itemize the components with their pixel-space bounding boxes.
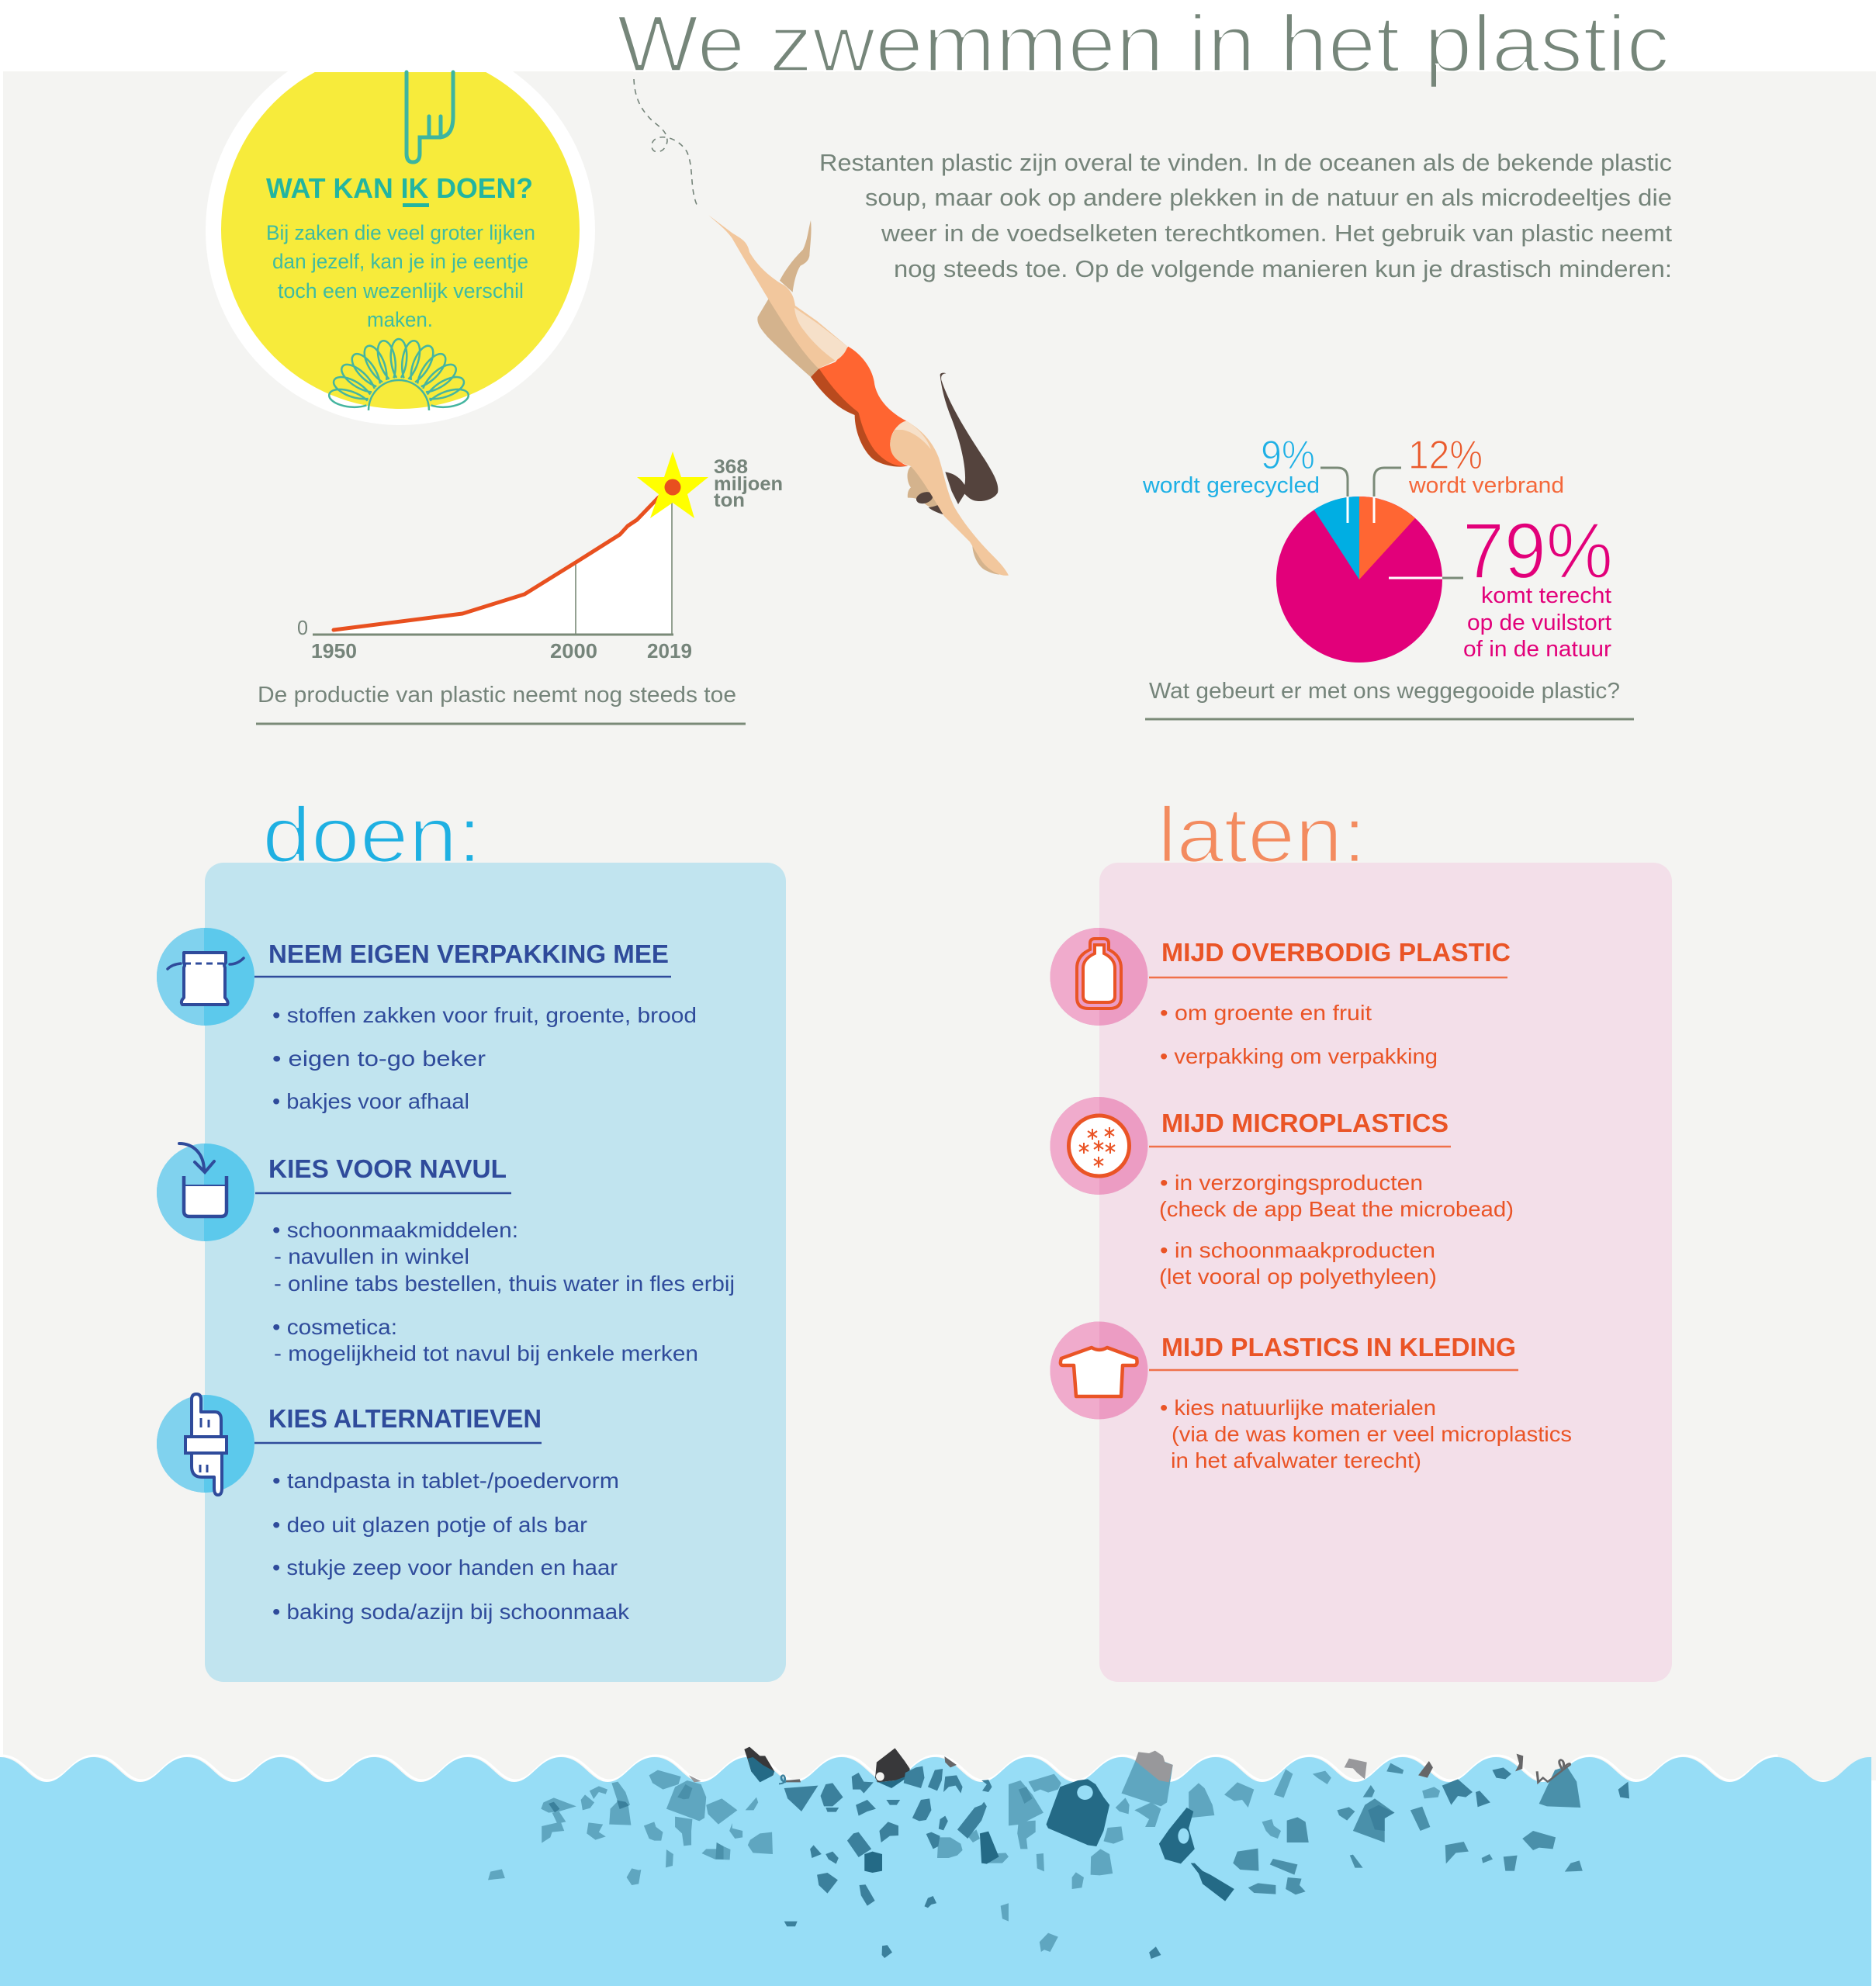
icon: microplastic particles <box>1050 1097 1148 1195</box>
label: 79%: op de vuilstort <box>1467 611 1611 635</box>
list: (check de app Beat the microbead) <box>1159 1197 1514 1221</box>
callout: wat kan ik doen circle <box>206 36 595 425</box>
list: • kies natuurlijke materialen <box>1160 1396 1436 1420</box>
icon: half flower <box>327 339 470 411</box>
list: • bakjes voor afhaal <box>272 1089 469 1113</box>
label: 9% <box>1142 433 1320 498</box>
list: • eigen to-go beker <box>272 1047 486 1071</box>
item: neem eigen verpakking mee <box>157 928 697 1113</box>
axis labels <box>297 616 692 663</box>
item: kies voor navul: KIES VOOR NAVUL <box>268 1154 507 1183</box>
chart area <box>334 487 672 635</box>
icon: cloth bag <box>157 928 254 1026</box>
label: 9%: 9% <box>1261 433 1315 478</box>
list <box>1160 1396 1572 1472</box>
label: 12% <box>1408 433 1564 498</box>
list <box>272 1218 735 1365</box>
list: • tandpasta in tablet-/poedervorm <box>272 1469 619 1493</box>
list: - online tabs bestellen, thuis water in fles erbij <box>274 1272 735 1296</box>
item: mijd plastics in kleding: MIJD PLASTICS IN KLEDING <box>1161 1333 1516 1361</box>
list <box>1159 1171 1514 1289</box>
item: mijd microplastics <box>1050 1097 1514 1289</box>
pie slices <box>1276 496 1442 663</box>
pie chart: plastic waste <box>1142 433 1634 719</box>
axis labels: 0 <box>297 616 308 639</box>
list: (via de was komen er veel microplastics <box>1172 1422 1572 1446</box>
item: kies alternatieven: KIES ALTERNATIEVEN <box>268 1404 542 1433</box>
list: • cosmetica: <box>272 1315 397 1339</box>
intro text: weer in de voedselketen terechtkomen. Het gebruik van plastic neemt <box>881 220 1673 247</box>
label: 79%: 79% <box>1462 507 1613 595</box>
list: • stukje zeep voor handen en haar <box>272 1555 618 1579</box>
item: mijd overbodig plastic: MIJD OVERBODIG PLASTIC <box>1161 938 1511 967</box>
label: 9%: wordt gerecycled <box>1142 473 1320 498</box>
list <box>272 1003 697 1113</box>
intro text: nog steeds toe. Op de volgende manieren kun je drastisch minderen: <box>894 256 1672 282</box>
intro text <box>819 150 1673 282</box>
list: • deo uit glazen potje of als bar <box>272 1513 587 1537</box>
value label <box>714 456 783 511</box>
item: neem eigen verpakking mee: NEEM EIGEN VERPAKKING MEE <box>268 939 669 968</box>
value label: ton <box>714 490 745 511</box>
axis labels: 2019 <box>647 639 692 663</box>
value label: 368 <box>714 456 748 478</box>
icon: hands with cuff <box>157 1394 254 1495</box>
item: kies voor navul <box>157 1144 735 1365</box>
item: mijd microplastics: MIJD MICROPLASTICS <box>1161 1109 1449 1137</box>
list: • schoonmaakmiddelen: <box>272 1218 518 1242</box>
list <box>272 1469 630 1624</box>
list: (let vooral op polyethyleen) <box>1159 1265 1437 1289</box>
list: • stoffen zakken voor fruit, groente, brood <box>272 1003 697 1027</box>
heading: laten: laten: <box>1158 792 1366 879</box>
label: 12%: 12% <box>1408 433 1483 478</box>
title: We zwemmen in het plastic <box>617 0 1670 89</box>
plastic waste floating in water <box>488 1747 1629 1959</box>
label: 79%: komt terecht <box>1481 583 1611 608</box>
item: kies alternatieven <box>157 1394 630 1624</box>
callout text: Bij zaken die veel groter lijken <box>266 221 535 244</box>
list: - navullen in winkel <box>274 1244 469 1268</box>
icon: t-shirt <box>1050 1322 1148 1420</box>
icon: refill jar <box>157 1144 254 1241</box>
list: • verpakking om verpakking <box>1160 1044 1438 1068</box>
panel: laten <box>1050 863 1672 1682</box>
icon: bottle <box>1050 928 1148 1026</box>
item: mijd plastics in kleding <box>1050 1322 1572 1472</box>
item: mijd overbodig plastic <box>1050 928 1511 1068</box>
label: 12%: wordt verbrand <box>1408 473 1564 498</box>
label: 79%: of in de natuur <box>1463 637 1611 662</box>
list <box>1160 1001 1438 1068</box>
callout text: dan jezelf, kan je in je eentje <box>272 250 528 273</box>
chart caption: De productie van plastic neemt nog steeds toe <box>258 683 736 708</box>
callout text: toch een wezenlijk verschil <box>278 279 524 303</box>
axis labels: 2000 <box>550 639 597 663</box>
callout text <box>266 221 535 331</box>
illustration: diver <box>708 215 1009 576</box>
icon: star marker <box>637 452 708 518</box>
label: 79% <box>1462 507 1613 662</box>
list: • baking soda/azijn bij schoonmaak <box>272 1600 630 1624</box>
list: in het afvalwater terecht) <box>1171 1448 1421 1472</box>
callout text: maken. <box>367 308 433 331</box>
axis labels: 1950 <box>311 639 357 663</box>
dive trajectory dashed line <box>634 79 698 208</box>
list: • in verzorgingsproducten <box>1160 1171 1423 1195</box>
heading: doen: doen: <box>262 792 482 879</box>
intro text: soup, maar ook op andere plekken in de natuur en als microdeeltjes die <box>865 185 1672 211</box>
pie caption: Wat gebeurt er met ons weggegooide plastic? <box>1149 679 1620 704</box>
list: • in schoonmaakproducten <box>1160 1238 1435 1262</box>
leader lines <box>1320 468 1463 578</box>
icon: pointing hand <box>407 72 453 162</box>
panel: doen <box>157 863 786 1682</box>
line chart: plastic production <box>256 452 783 724</box>
water with waves <box>0 1756 1871 1986</box>
intro text: Restanten plastic zijn overal te vinden. In de oceanen als de bekende plastic <box>819 150 1672 176</box>
list: - mogelijkheid tot navul bij enkele merken <box>274 1341 698 1365</box>
value label: miljoen <box>714 473 783 495</box>
callout heading: WAT KAN IK DOEN? <box>266 172 533 204</box>
list: • om groente en fruit <box>1160 1001 1372 1025</box>
